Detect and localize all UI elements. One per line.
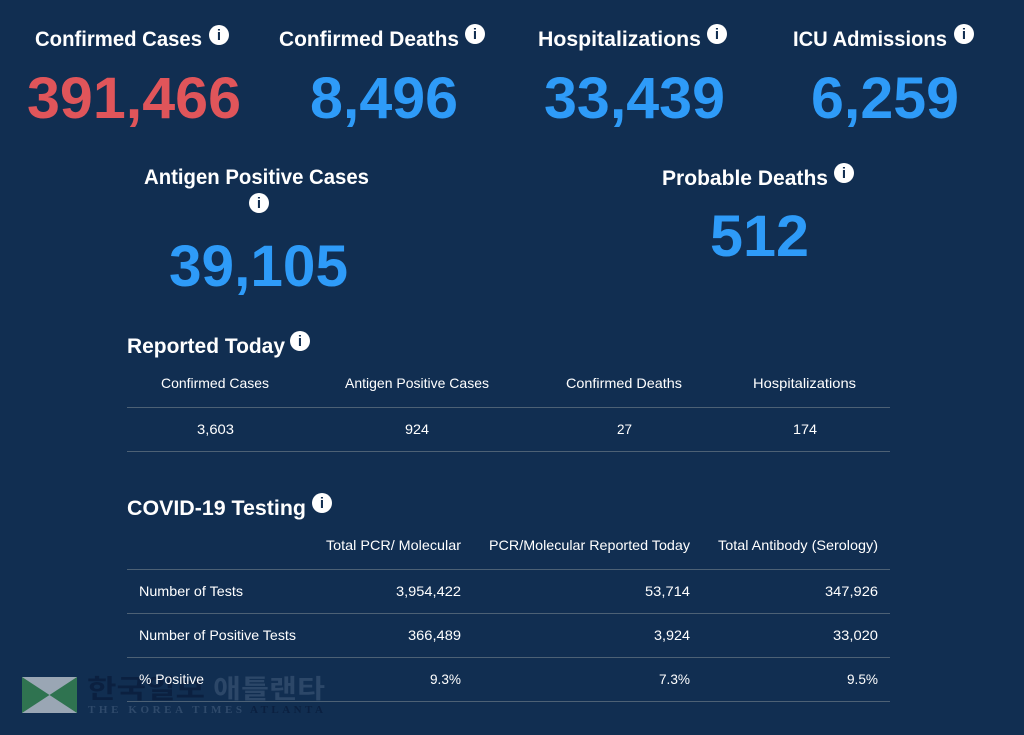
heading: reported today: Reported Today	[127, 334, 285, 358]
icon: logo flag	[22, 677, 77, 713]
watermark: the korea times atlanta: ATLANTA	[250, 704, 323, 716]
table: reported today: Confirmed Cases	[161, 375, 269, 391]
heading: reported today: i	[298, 333, 302, 350]
table: testing	[127, 537, 890, 702]
heading: covid-19 testing: COVID-19 Testing	[127, 496, 306, 520]
stat: antigen positive cases: Antigen Positive Cases	[144, 165, 369, 189]
table: testing: 9.3%	[430, 671, 461, 687]
table: reported today	[127, 375, 890, 452]
stat: confirmed deaths: 8,496	[310, 66, 458, 131]
stat: confirmed cases	[27, 25, 241, 131]
table: testing: % Positive	[139, 671, 204, 687]
table: reported today: Antigen Positive Cases	[345, 375, 489, 391]
table: reported today: 3,603	[197, 421, 234, 437]
table: reported today: Confirmed Deaths	[566, 375, 682, 391]
table: reported today: 924	[405, 421, 429, 437]
stat: confirmed cases: 391,466	[27, 66, 241, 131]
stat: confirmed deaths: Confirmed Deaths	[279, 27, 459, 51]
watermark: the korea times atlanta: THE KOREA TIMES	[88, 704, 242, 716]
table: reported today: Hospitalizations	[753, 375, 856, 391]
stat: antigen positive cases	[144, 165, 369, 299]
stat: ICU admissions: i	[962, 26, 966, 43]
table: testing: Total Antibody (Serology)	[718, 537, 878, 553]
table: testing: 366,489	[408, 627, 461, 643]
watermark: the korea times atlanta: 애틀랜타	[213, 674, 325, 704]
table: testing: PCR/Molecular Reported Today	[489, 537, 690, 553]
stat: hospitalizations: Hospitalizations	[538, 27, 701, 51]
stat: probable deaths: Probable Deaths	[662, 166, 828, 190]
stat: probable deaths	[662, 163, 854, 269]
heading: covid-19 testing: i	[320, 495, 324, 512]
stat: hospitalizations: i	[715, 26, 719, 43]
panel: covid-19 testing	[127, 493, 890, 702]
table: testing: 53,714	[645, 583, 690, 599]
table: testing: Number of Tests	[139, 583, 243, 599]
stat: confirmed deaths: i	[473, 26, 477, 43]
stat: ICU admissions: 6,259	[811, 66, 959, 131]
table: reported today: 174	[793, 421, 817, 437]
table: testing: 9.5%	[847, 671, 878, 687]
table: testing: 3,924	[654, 627, 690, 643]
watermark: the korea times atlanta	[22, 674, 325, 716]
stat: hospitalizations	[538, 24, 727, 131]
watermark: the korea times atlanta: 한국일보	[87, 674, 205, 704]
stat: confirmed cases: Confirmed Cases	[35, 27, 202, 51]
table: testing: 7.3%	[659, 671, 690, 687]
table: testing: Total PCR/ Molecular	[326, 537, 461, 553]
stat: confirmed deaths	[279, 24, 485, 131]
stat: ICU admissions	[793, 24, 974, 131]
stat: ICU admissions: ICU Admissions	[793, 27, 947, 51]
stat: confirmed cases: i	[217, 27, 221, 44]
table: reported today: 27	[617, 421, 632, 437]
table: testing: 3,954,422	[396, 583, 461, 599]
table: testing: 33,020	[833, 627, 878, 643]
stat: probable deaths: i	[842, 165, 846, 182]
stat: hospitalizations: 33,439	[544, 66, 725, 131]
stat: antigen positive cases: i	[257, 195, 261, 212]
table: testing: Number of Positive Tests	[139, 627, 296, 643]
panel: reported today	[127, 331, 890, 452]
stat: antigen positive cases: 39,105	[169, 234, 348, 299]
stat: probable deaths: 512	[710, 204, 809, 269]
table: testing: 347,926	[825, 583, 878, 599]
